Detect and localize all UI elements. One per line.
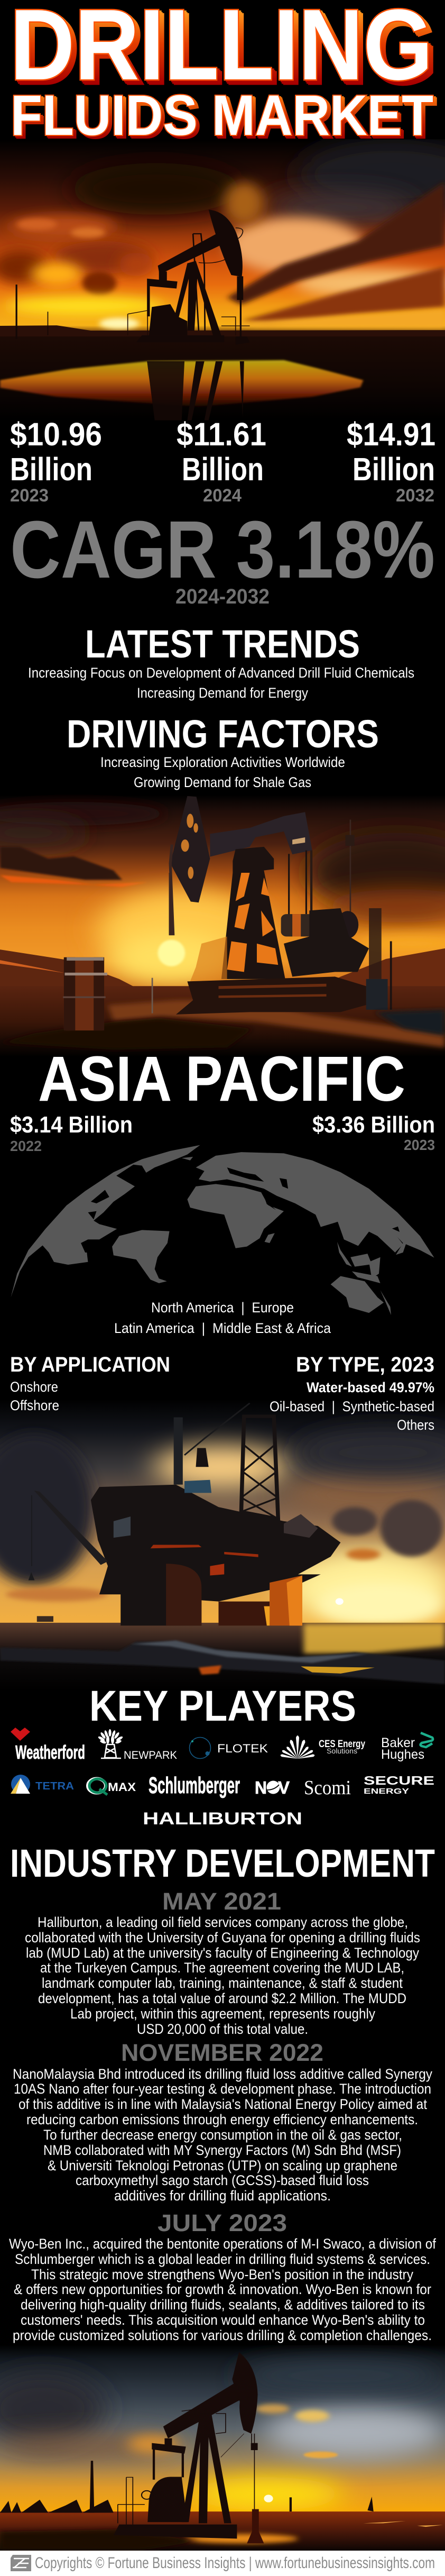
- icon: offshore rig silhouette: [29, 1403, 340, 1625]
- logo: Newpark: [98, 1729, 177, 1761]
- block: May 2021 development: lab (MUD Lab) at the university's faculty of Engineering & Technology: [26, 1945, 420, 1961]
- icon: Fortune Business Insights logo: [11, 2555, 31, 2571]
- block: May 2021 development: landmark computer lab, training, maintenance, & staff & student: [42, 1975, 403, 1991]
- logo: Baker Hughes: Hughes: [381, 1747, 424, 1762]
- logo: Secure Energy: ENERGY: [364, 1787, 409, 1796]
- image: pumpjack at dusk: [0, 2345, 445, 2551]
- stat: 2023 regional value: 2023: [404, 1137, 435, 1153]
- block: November 2022 development: NOVEMBER 2022: [121, 2039, 323, 2066]
- title: Drilling Fluids Market: [10, 0, 438, 150]
- logo: Weatherford: Weatherford: [15, 1741, 85, 1763]
- block: November 2022 development: To further decrease energy consumption in the oil & gas sector,: [43, 2127, 402, 2143]
- block: November 2022 development: additives for drilling fluid applications.: [114, 2188, 331, 2204]
- stat: 2024 market value: Billion: [182, 451, 264, 487]
- logo: Baker Hughes: [381, 1733, 433, 1762]
- footer: copyright bar: [0, 2551, 445, 2576]
- section: by application: Onshore: [10, 1379, 58, 1395]
- section: by type: BY TYPE, 2023: [296, 1353, 434, 1376]
- section: driving factors: DRIVING FACTORS: [67, 712, 379, 756]
- heading: key players: KEY PLAYERS: [89, 1682, 356, 1730]
- icon: pumpjack silhouette with distant rigs: [0, 2352, 374, 2543]
- section: by application: BY APPLICATION: [10, 1353, 170, 1376]
- block: July 2023 development: [9, 2209, 437, 2343]
- text: other regions: Latin America | Middle East & Africa: [114, 1320, 331, 1336]
- logo: NOV: [255, 1778, 290, 1797]
- logo: Q Max: MAX: [108, 1780, 136, 1794]
- image: sunset oil pumpjack hero: [0, 139, 445, 421]
- logo: Flotek: [189, 1737, 268, 1758]
- logo: Schlumberger: Schlumberger: [149, 1773, 240, 1798]
- stat: 2023 market value: $10.96: [10, 416, 102, 452]
- section: by type: Others: [397, 1417, 434, 1433]
- section: latest trends: Increasing Focus on Development of Advanced Drill Fluid Chemicals: [28, 665, 414, 681]
- logo: Secure Energy: [364, 1774, 434, 1796]
- logo: Weatherford: [11, 1728, 85, 1763]
- stat: 2024 market value: $11.61: [177, 416, 266, 452]
- block: May 2021 development: at the Turkeyen Campus. The agreement covering the MUD LAB,: [40, 1960, 404, 1976]
- stat: 2032 market value: $14.91: [347, 416, 435, 452]
- section: latest trends: Increasing Demand for Energy: [137, 685, 309, 701]
- block: July 2023 development: JULY 2023: [157, 2209, 287, 2236]
- block: November 2022 development: [13, 2039, 433, 2204]
- image: offshore oil platform at sunset: [0, 1399, 445, 1692]
- heading: Asia Pacific: ASIA PACIFIC: [38, 1043, 405, 1115]
- block: May 2021 development: Halliburton, a leading oil field services company across the globe,: [38, 1914, 408, 1930]
- stat: 2023 regional value: [312, 1112, 435, 1153]
- stat: 2023 market value: 2023: [10, 486, 49, 506]
- section: latest trends: [28, 622, 414, 701]
- map: world globe: [11, 1145, 434, 1315]
- section: driving factors: Growing Demand for Shale Gas: [134, 774, 311, 790]
- logo: Baker Hughes: Baker: [381, 1735, 415, 1750]
- stat: 2032 market value: 2032: [396, 486, 434, 506]
- block: May 2021 development: [25, 1888, 420, 2037]
- block: May 2021 development: Lab project, within this agreement, represents roughly: [70, 2006, 376, 2022]
- logo: Tetra: TETRA: [35, 1780, 74, 1792]
- logo: Newpark: NEWPARK: [124, 1749, 177, 1761]
- block: May 2021 development: USD 20,000 of this total value.: [137, 2021, 308, 2037]
- block: November 2022 development: & Universiti Teknologi Petronas (UTP) on scaling up graphene: [48, 2158, 397, 2173]
- block: July 2023 development: This strategic move strengthens Wyo-Ben's position in the industry: [31, 2267, 414, 2282]
- block: May 2021 development: collaborated with the University of Guyana for opening a drilling fluids: [25, 1930, 420, 1945]
- section: by type: [270, 1353, 434, 1433]
- block: November 2022 development: carboxymethyl sago starch (GCSS)-based fluid loss: [76, 2172, 369, 2188]
- section: by application: [10, 1353, 170, 1413]
- logo: Flotek: FLOTEK: [217, 1742, 268, 1755]
- logos: key players: [11, 1728, 434, 1828]
- stat: 2022 regional value: $3.14 Billion: [10, 1112, 133, 1138]
- block: July 2023 development: delivering high-quality drilling fluids, sealants, & additives tailored to its: [21, 2297, 425, 2313]
- section: driving factors: [67, 712, 379, 790]
- block: May 2021 development: development, has a total value of around $2.2 Million. The MUDD: [38, 1990, 406, 2006]
- stat: 2023 market value: Billion: [10, 451, 92, 487]
- logo: Halliburton: HALLIBURTON: [143, 1809, 302, 1828]
- stat: 2032 market value: [347, 416, 435, 506]
- logo: Scomi: Scomi: [304, 1777, 351, 1799]
- stat: 2024 market value: 2024: [203, 486, 242, 506]
- block: November 2022 development: NMB collaborated with MY Synergy Factors (M) Sdn Bhd (MSF): [43, 2142, 401, 2158]
- block: November 2022 development: reducing carbon emissions through energy efficiency enhancements.: [26, 2112, 418, 2127]
- stat: 2023 market value: [10, 416, 102, 506]
- stat: 2023 regional value: $3.36 Billion: [312, 1112, 435, 1138]
- section: driving factors: Increasing Exploration Activities Worldwide: [100, 754, 345, 770]
- stat: 2024 market value: [177, 416, 266, 506]
- logo: Secure Energy: SECURE: [364, 1774, 434, 1787]
- section: by type: Water-based 49.97%: [307, 1380, 434, 1395]
- block: May 2021 development: MAY 2021: [162, 1888, 281, 1915]
- stat: 2022 regional value: 2022: [10, 1138, 42, 1154]
- stat: 2022 regional value: [10, 1112, 133, 1154]
- logo: Q Max: [88, 1778, 136, 1795]
- logo: Tetra: [11, 1775, 74, 1794]
- text: other regions: North America | Europe: [151, 1300, 294, 1316]
- logo: NOV: N: [255, 1778, 267, 1797]
- icon: large pumpjack: [152, 796, 445, 1036]
- logo: NOV: V: [278, 1778, 290, 1797]
- stat: CAGR: 2024-2032: [175, 585, 270, 608]
- image: pumpjack at sunset with barrel: [0, 793, 445, 1058]
- logo: CES Energy Solutions: Solutions: [327, 1747, 357, 1755]
- section: latest trends: LATEST TRENDS: [85, 622, 360, 666]
- logo: CES Energy Solutions: [280, 1735, 365, 1760]
- icon: oil barrel: [63, 957, 107, 1030]
- logo: CES Energy Solutions: CES Energy: [319, 1739, 365, 1750]
- text: other regions: [114, 1300, 331, 1336]
- icon: pumpjack silhouette: [16, 209, 250, 421]
- section: by application: Offshore: [10, 1397, 59, 1413]
